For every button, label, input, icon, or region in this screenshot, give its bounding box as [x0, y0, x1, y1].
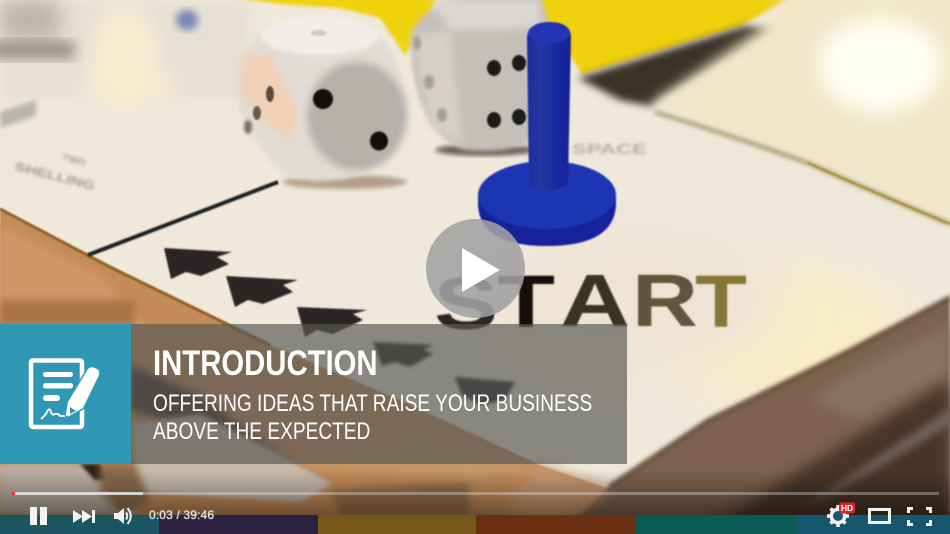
- blurred square label on board: [13, 152, 96, 193]
- caption subtitle: OFFERING IDEAS THAT RAISE YOUR BUSINESS: [153, 390, 592, 417]
- background: bright top-right corner: [650, 0, 950, 224]
- control: theater mode: [868, 508, 891, 524]
- progress bar: [12, 492, 939, 495]
- caption panel: [131, 324, 627, 464]
- blurred square label on board: TWO: [62, 152, 87, 168]
- control: settings gear with HD badge: HD: [841, 503, 853, 513]
- control: next: [73, 510, 95, 523]
- background: blurred corner top-left: [0, 0, 250, 128]
- background: wooden board edge right: [500, 297, 950, 534]
- arrows printed on board: [164, 248, 367, 337]
- die contact shadow: [283, 175, 407, 189]
- caption heading: INTRODUCTION: [153, 344, 378, 383]
- arrows faded under caption: [373, 342, 515, 405]
- buffered progress: [12, 492, 143, 495]
- control: fullscreen: [907, 507, 932, 526]
- background: wooden board edge left: [0, 209, 612, 534]
- START lettering: S: [434, 262, 498, 345]
- START lettering: T: [695, 260, 747, 343]
- bottom coloured strip: [0, 515, 950, 534]
- control: settings gear with HD badge: [827, 502, 855, 527]
- control: volume: [114, 507, 132, 525]
- background: dark game square: [578, 26, 780, 106]
- blue pawn: [478, 22, 616, 246]
- printed text behind pawn: SPACE: [572, 141, 647, 158]
- START lettering: T: [497, 260, 555, 343]
- control: pause: [30, 507, 47, 525]
- right die: [411, 0, 560, 156]
- icon: document and pen: [28, 358, 100, 430]
- divider line on board: [88, 182, 278, 255]
- play button: [426, 219, 525, 318]
- START lettering: A: [560, 259, 630, 342]
- played progress: [12, 492, 15, 495]
- START lettering: [434, 259, 747, 345]
- caption subtitle: ABOVE THE EXPECTED: [153, 418, 370, 445]
- time readout: 0:03 / 39:46: [149, 508, 214, 522]
- bottom darkening under controls: [0, 470, 950, 516]
- blurred square label on board: SHELLING: [13, 159, 96, 193]
- START lettering: R: [632, 259, 698, 342]
- left die: [238, 15, 408, 181]
- background: yellow game square: [225, 0, 795, 74]
- teal icon tile: [0, 324, 131, 464]
- caption subtitle: [153, 390, 592, 445]
